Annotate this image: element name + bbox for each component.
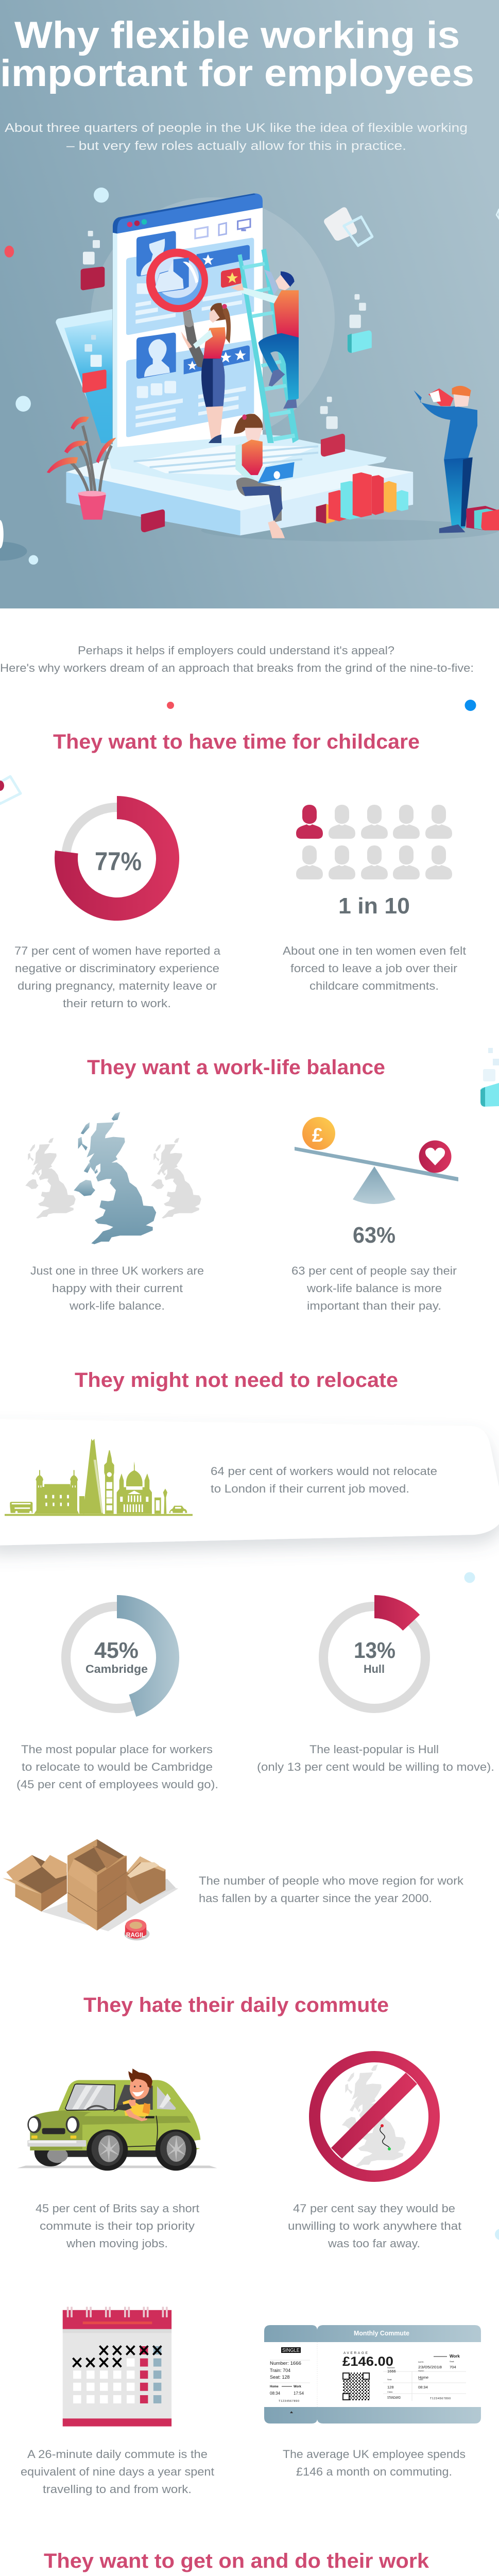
text: moving region: has fallen by a quarter since the year 2000.	[199, 1892, 432, 1905]
illustration: commute ticket: Monthly Commute	[354, 2329, 409, 2337]
text: Cambridge: The most popular place for workers	[21, 1743, 213, 1756]
heading: time for childcare: They want to have time for childcare	[53, 731, 420, 753]
text: balance over pay: 63 per cent of people say their	[291, 1264, 457, 1277]
icon: seesaw with coin and heart: £	[312, 1125, 323, 1146]
text: happy with balance: happy with their current	[52, 1282, 183, 1295]
illustration: London skyline	[5, 1439, 193, 1516]
title	[0, 14, 474, 94]
illustration: man driving green car	[17, 2069, 217, 2171]
illustration: commute ticket: 08:34	[418, 2385, 428, 2389]
illustration: commute ticket: £146.00	[342, 2354, 393, 2369]
heading: relocate: They might not need to relocate	[75, 1369, 398, 1392]
text: nine days: A 26-minute daily commute is the	[27, 2448, 208, 2461]
text: too far away: unwilling to work anywhere that	[288, 2219, 461, 2232]
illustration: commute ticket: Train: 704	[270, 2368, 290, 2373]
donut chart: Cambridge 45 per cent: Cambridge	[85, 1663, 148, 1675]
illustration: commute ticket: DATE:	[418, 2361, 424, 2363]
decor: dots and shapes	[0, 700, 499, 1107]
illustration: commute ticket: 1666	[387, 2369, 396, 2374]
icon: no long commute sign with UK map	[315, 2057, 434, 2176]
illustration: commute ticket: Seat:	[387, 2378, 392, 2381]
text: short commute	[36, 2202, 199, 2250]
illustration: commute ticket: Seat: 128	[270, 2375, 290, 2380]
illustration: commute ticket: Home	[418, 2375, 428, 2380]
donut chart: 77 per cent	[55, 796, 179, 921]
text: short commute: commute is their top priority	[40, 2219, 195, 2232]
heading: work-life balance: They want a work-life balance	[87, 1056, 385, 1079]
lead-in text: Here's why workers dream of an approach that breaks from the grind of the nine-to-five:	[0, 662, 474, 674]
text: Hull: (only 13 per cent would be willing to move).	[257, 1760, 494, 1773]
text: 64 per cent: 64 per cent of workers would not relocate	[211, 1465, 437, 1478]
text: balance over pay	[291, 1264, 457, 1312]
text: happy with balance: Just one in three UK workers are	[30, 1264, 204, 1277]
donut chart: Hull 13 per cent	[323, 1595, 425, 1708]
illustration: commute ticket: Home	[270, 2385, 279, 2388]
intro text	[5, 121, 468, 153]
text: £146 a month: £146 a month on commuting.	[296, 2465, 452, 2478]
text: balance over pay: important than their pay.	[307, 1299, 441, 1312]
text: short commute: when moving jobs.	[66, 2237, 168, 2250]
illustration: commute ticket: Work	[294, 2385, 302, 2388]
donut chart: Cambridge 45 per cent	[66, 1595, 179, 1717]
text: discrimination: negative or discriminatory experience	[15, 962, 219, 975]
text: Hull	[257, 1743, 494, 1773]
decor: edge dot	[495, 2229, 499, 2240]
illustration: commute ticket: TIME:	[418, 2378, 424, 2381]
text: 64 per cent	[211, 1465, 437, 1495]
text: discrimination: during pregnancy, maternity leave or	[18, 979, 217, 992]
lead-in text: Perhaps it helps if employers could understand it's appeal?	[78, 644, 394, 657]
stat: 1 in 10: 1 in 10	[338, 893, 410, 919]
donut chart: Hull 13 per cent: Hull	[364, 1663, 385, 1675]
decor: dot	[464, 1572, 475, 1583]
illustration: plant, blocks, chart, seated woman and megaphone man	[0, 207, 499, 565]
illustration: commute ticket: Number: 1666	[270, 2361, 301, 2366]
illustration: platform and decor	[66, 430, 499, 541]
illustration: commute ticket: T1234567890	[430, 2397, 451, 2400]
text: moving region	[199, 1874, 464, 1905]
illustration: calendar	[63, 2307, 171, 2427]
illustration: commute ticket: 23/05/2018	[418, 2365, 442, 2369]
icon: seesaw with coin and heart	[295, 1117, 458, 1204]
illustration: commute ticket: 704	[450, 2365, 456, 2369]
illustration: commute ticket	[264, 2325, 481, 2424]
decor: floating shapes	[0, 207, 499, 565]
illustration: recruitment scene	[0, 188, 499, 565]
text: Cambridge: to relocate to would be Cambridge	[22, 1760, 213, 1773]
text: £146 a month	[283, 2448, 466, 2478]
text: short commute: 45 per cent of Brits say a short	[36, 2202, 199, 2215]
text: £146 a month: The average UK employee spends	[283, 2448, 466, 2461]
illustration: cardboard boxes: RAGIL	[126, 1931, 145, 1938]
text: discrimination: 77 per cent of women have reported a	[14, 944, 221, 957]
donut chart: 77 per cent: 77%	[95, 847, 142, 876]
text: nine days	[21, 2448, 214, 2496]
intro text: About three quarters of people in the UK like the idea of flexible working	[5, 121, 468, 135]
QR code	[342, 2372, 370, 2400]
text: Cambridge	[16, 1743, 218, 1791]
text: discrimination: their return to work.	[63, 997, 171, 1010]
illustration: commute ticket: Number:	[387, 2366, 395, 2369]
text: balance over pay: work-life balance is more	[306, 1282, 442, 1295]
map: UK with grey copies	[25, 1112, 201, 1244]
text: forced to leave	[283, 944, 466, 992]
illustration: commute ticket: Class:	[387, 2391, 393, 2393]
stat: 63 per cent: 63%	[353, 1223, 395, 1248]
text: moving region: The number of people who move region for work	[199, 1874, 464, 1887]
section: childcare	[14, 731, 466, 1010]
text: forced to leave: About one in ten women even felt	[283, 944, 466, 957]
section: relocation	[0, 1369, 499, 1940]
illustration: cardboard boxes	[3, 1839, 178, 1940]
illustration: commute ticket: 128	[387, 2385, 394, 2389]
text: too far away: 47 per cent say they would be	[293, 2202, 455, 2215]
section: work-life balance	[25, 1056, 458, 1312]
text: happy with balance: work-life balance.	[69, 1299, 165, 1312]
icon grid: one in ten people	[296, 805, 452, 879]
text: nine days: equivalent of nine days a year spent	[21, 2465, 214, 2478]
text: discrimination	[14, 944, 221, 1010]
illustration: window, tablet and climbing people	[56, 188, 299, 447]
heading: daily commute: They hate their daily commute	[83, 1994, 389, 2016]
section: commute	[17, 1994, 499, 2496]
lead-in text	[0, 644, 474, 674]
illustration: commute ticket: STANDARD	[387, 2395, 401, 2400]
illustration: commute ticket: AVERAGE	[343, 2351, 368, 2355]
illustration: commute ticket: Seat:	[450, 2360, 454, 2363]
illustration: commute ticket: T1234567890	[279, 2400, 299, 2403]
text: too far away: was too far away.	[328, 2237, 420, 2250]
illustration: commute ticket: SINGLE	[282, 2348, 300, 2353]
illustration: commute ticket: Home:	[418, 2369, 424, 2372]
text: Cambridge: (45 per cent of employees would go).	[16, 1778, 218, 1791]
text: forced to leave: childcare commitments.	[309, 979, 439, 992]
title: important for employees	[0, 53, 474, 94]
intro text: – but very few roles actually allow for this in practice.	[66, 139, 406, 153]
text: 64 per cent: to London if their current job moved.	[211, 1482, 409, 1495]
title: Why flexible working is	[14, 14, 460, 56]
text: forced to leave: forced to leave a job over their	[290, 962, 457, 975]
illustration: commute ticket: 08:34	[270, 2391, 281, 2396]
illustration: commute ticket: 17:54	[294, 2391, 304, 2396]
heading: do their work: They want to get on and do their work	[44, 2550, 429, 2572]
text: too far away	[288, 2202, 461, 2250]
illustration: commute ticket: Work	[450, 2354, 460, 2359]
panel: London card	[0, 1419, 499, 1546]
text: Hull: The least-popular is Hull	[309, 1743, 439, 1756]
hero panel	[0, 0, 499, 608]
text: nine days: travelling to and from work.	[43, 2483, 192, 2496]
text: happy with balance	[30, 1264, 204, 1312]
donut chart: Hull 13 per cent: 13%	[354, 1638, 395, 1663]
donut chart: Cambridge 45 per cent: 45%	[94, 1638, 139, 1663]
